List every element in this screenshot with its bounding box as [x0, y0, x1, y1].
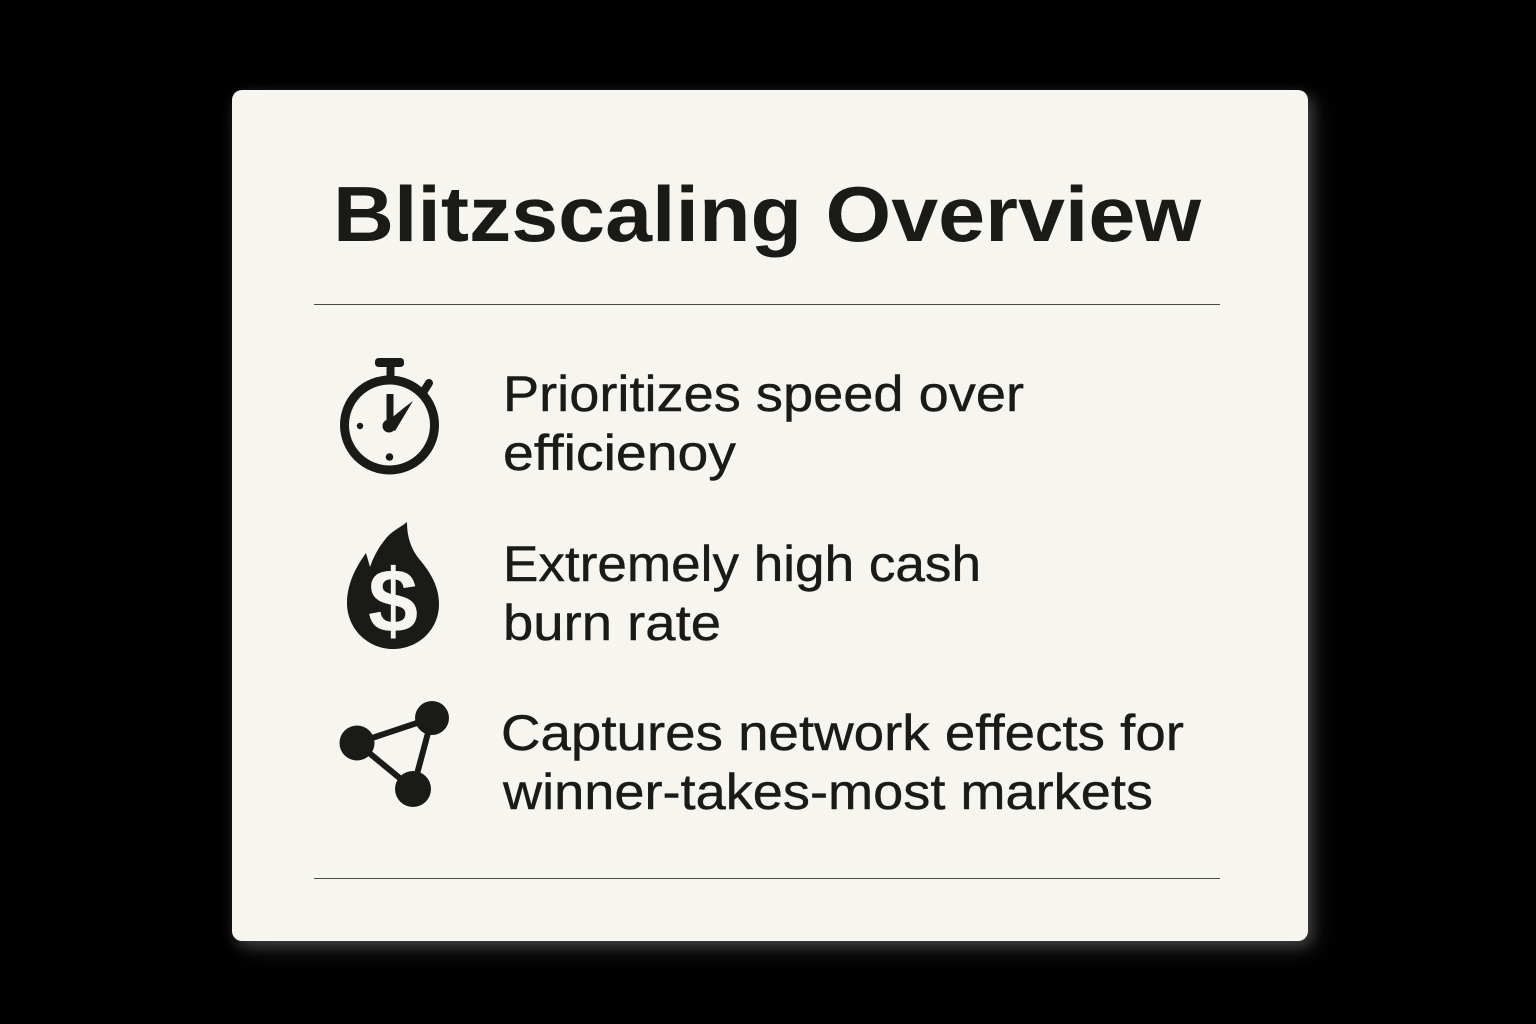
text: cash burn rate [503, 536, 981, 651]
text: speed over efficiency: efficienoy [503, 425, 736, 481]
icon: stopwatch [344, 358, 434, 470]
text: network effects [501, 705, 1184, 820]
title: Blitzscaling Overview [333, 170, 1201, 258]
text: speed over efficiency [503, 366, 1024, 481]
text: cash burn rate: burn rate [503, 595, 721, 651]
text: network effects: Captures network effects for [501, 705, 1184, 761]
icon: network nodes [340, 701, 449, 807]
panel: overview card [232, 90, 1308, 941]
text: cash burn rate: Extremely high cash [503, 536, 981, 592]
text: network effects: winner-takes-most markets [502, 764, 1153, 820]
text: speed over efficiency: Prioritizes speed over [503, 366, 1024, 422]
icon: flame with dollar sign [347, 522, 439, 652]
icon: flame with dollar sign: $ [368, 552, 418, 652]
